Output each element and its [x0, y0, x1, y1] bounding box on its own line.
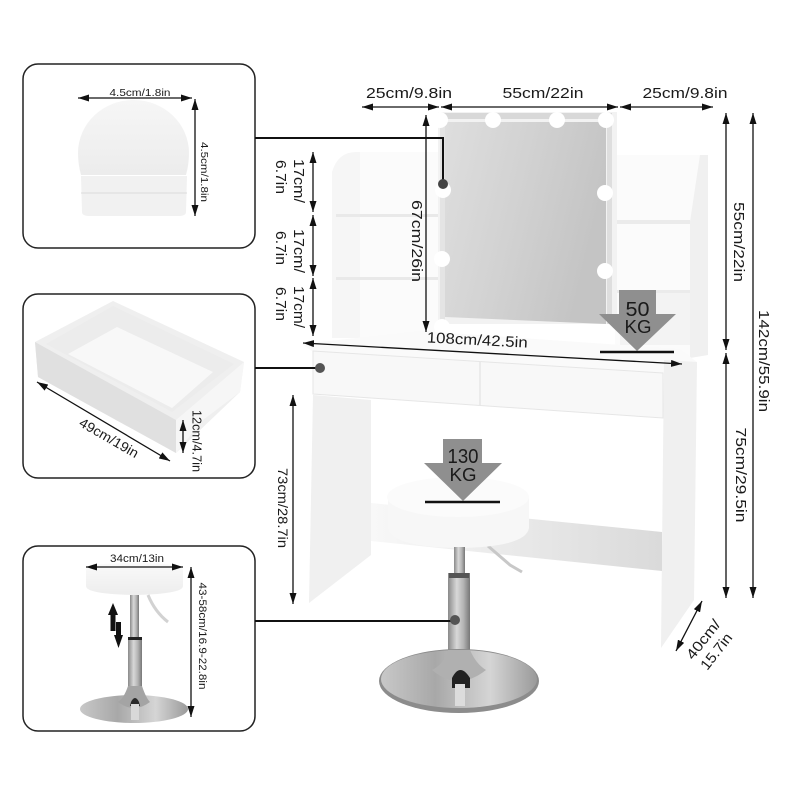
seat width dimension: [86, 553, 183, 567]
dimension: shelf 2: [272, 215, 313, 276]
icon: up and down arrows: [108, 603, 123, 648]
dimension: depth: [676, 601, 736, 673]
panel: drawer detail: [23, 294, 255, 478]
dimension: desk height: 75cm/29.5in: [732, 427, 748, 523]
icon: globe bulb: [78, 100, 189, 216]
desktop: [302, 331, 697, 373]
icon: drawer: [35, 301, 244, 453]
seat width dimension: 34cm/13in: [110, 553, 164, 565]
dimension: desk width: 108cm/42.5in: [426, 329, 528, 352]
height dimension: 12cm/4.7in: [190, 410, 204, 472]
panel: stool detail: [23, 546, 255, 731]
weight marker: 50 KG: [599, 290, 676, 352]
weight marker: 130 KG: KG: [450, 465, 476, 485]
weight marker: 130 KG: [424, 439, 502, 502]
dimension: under desk height: 73cm/28.7in: [275, 468, 291, 548]
callout: drawer connector: [255, 363, 325, 373]
vanity desk: [302, 112, 708, 648]
height dimension: [183, 410, 204, 472]
dimension: shelf 1: 6.7in: [272, 160, 288, 194]
callout: bulb connector: [255, 138, 448, 189]
icon: small stool: [80, 563, 188, 723]
callout: stool connector: [255, 615, 460, 625]
dimension: shelf 3: 6.7in: [272, 287, 288, 321]
weight marker: 50 KG: KG: [624, 317, 652, 337]
dimension: shelf 1: [272, 152, 313, 212]
hutch left: [332, 152, 438, 338]
dimension: desk width: [303, 329, 682, 364]
left leg: [309, 395, 371, 603]
dimension: hutch height: 55cm/22in: [730, 202, 746, 282]
mirror bulbs: [432, 112, 614, 343]
mirror: [432, 112, 617, 343]
width dimension: [78, 87, 192, 99]
right leg: [661, 360, 697, 648]
weight marker: 50 KG: 50: [626, 299, 650, 321]
width dimension: 4.5cm/1.8in: [110, 87, 171, 99]
stool height dimension: 43-58cm/16.9-22.8in: [196, 582, 208, 690]
panel: light bulb detail: [23, 64, 255, 248]
dimension: depth: 40cm/: [684, 616, 725, 663]
hutch right: [608, 155, 708, 358]
length dimension: 49cm/19in: [77, 415, 141, 461]
dimension: shelf 3: [272, 278, 313, 336]
stool: [379, 477, 539, 713]
weight marker: 130 KG: 130: [448, 446, 478, 468]
crossbar: [371, 503, 662, 571]
dimension: shelf 2: 17cm/: [290, 229, 306, 274]
dimension: right top width: [620, 85, 728, 107]
dimension: mirror height: 67cm/26in: [408, 200, 424, 282]
height dimension: 4.5cm/1.8in: [198, 142, 210, 202]
dimension: depth: 15.7in: [698, 631, 736, 673]
dimension: left top width: 25cm/9.8in: [366, 85, 452, 102]
dimension: shelf 2: 6.7in: [272, 231, 288, 265]
drawers: [313, 351, 663, 418]
length dimension: [37, 382, 170, 461]
height dimension: [195, 99, 210, 216]
dimension: shelf 1: 17cm/: [290, 159, 306, 204]
dimension: right top width: 25cm/9.8in: [642, 85, 728, 102]
dimension: mirror width: 55cm/22in: [502, 85, 584, 102]
dimension: shelf 3: 17cm/: [290, 286, 306, 329]
dimension: total height: 142cm/55.9in: [755, 310, 771, 412]
dimension: left top width: [362, 85, 452, 107]
